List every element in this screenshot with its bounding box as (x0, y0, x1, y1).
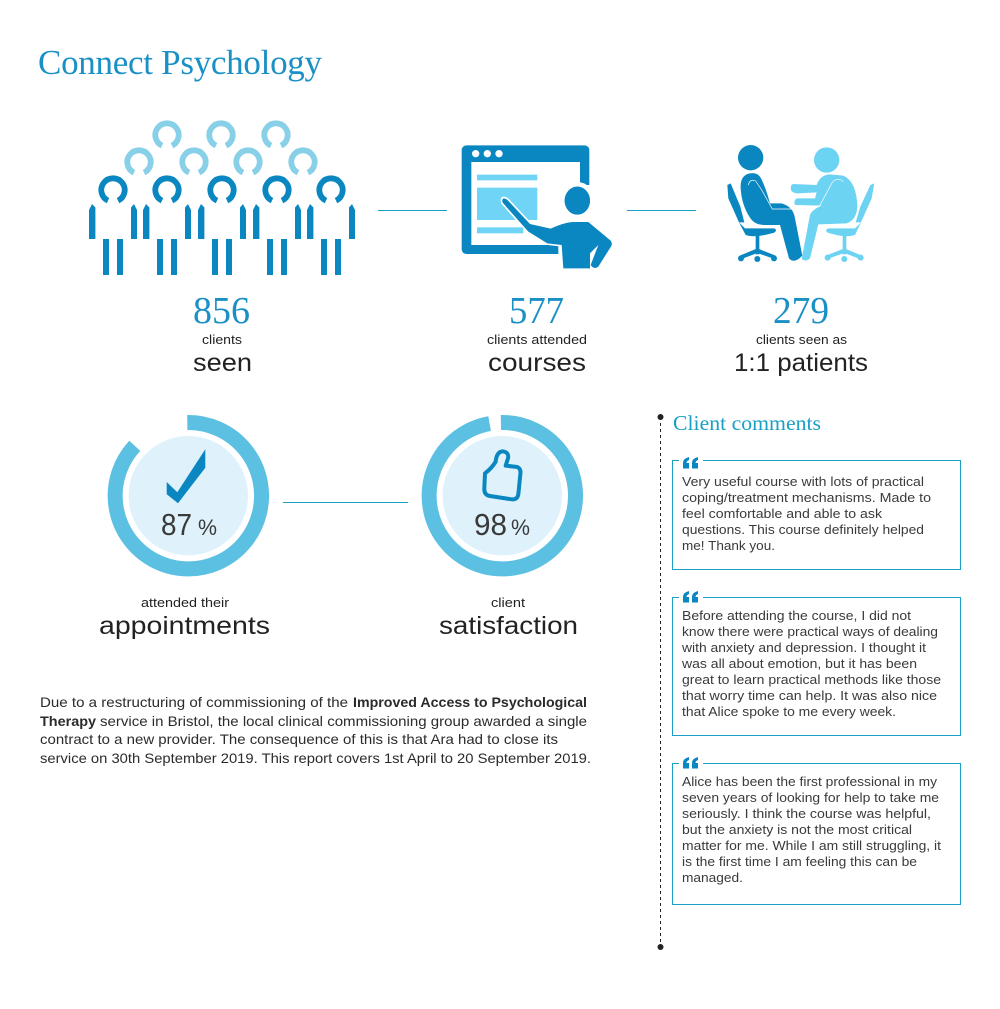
donut: attended appointments 87% (115, 422, 262, 569)
connector line (378, 210, 447, 211)
label: client satisfaction (439, 595, 578, 640)
label: attended appointments: attended their (141, 595, 230, 610)
comment box 3: seven years of looking for help to take me (682, 790, 939, 805)
comment box 2: that Alice spoke to me every week. (682, 704, 896, 719)
comment box 2: with anxiety and depression. I thought it (681, 640, 926, 655)
comment box 1: Very useful course with lots of practical (682, 474, 924, 489)
connector line (283, 502, 408, 503)
stat: clients attended courses: courses (488, 349, 586, 377)
label: client satisfaction: client (491, 595, 525, 610)
comment box 1: coping/treatment mechanisms. Made to (682, 490, 931, 505)
stat: clients seen (193, 290, 252, 377)
label: attended appointments (99, 595, 270, 640)
stat: clients attended courses (487, 290, 587, 377)
text block: service explanation (40, 694, 591, 766)
stat: clients seen: clients (202, 332, 243, 347)
donut: client satisfaction 98% (429, 422, 576, 569)
comment box 2: great to learn practical methods like those (682, 672, 941, 687)
comment box 2: know there were practical ways of dealing (682, 624, 938, 639)
label: attended appointments: appointments (99, 612, 270, 640)
stat: clients seen: seen (193, 349, 252, 377)
comment box 2: Before attending the course, I did not (682, 608, 911, 623)
stat: 1:1 patients (734, 290, 868, 377)
donut: attended appointments 87%: % (198, 515, 217, 540)
comment box 3: Alice has been the first professional in my (682, 774, 938, 789)
icon: one-to-one session (727, 145, 874, 262)
comment box 1 (672, 455, 960, 570)
donut: attended appointments 87%: 87 (161, 507, 192, 542)
icon: quote mark (683, 757, 698, 768)
comment box 2 (672, 591, 960, 736)
donut: client satisfaction 98%: % (511, 515, 530, 540)
stat: 1:1 patients: 279 (773, 290, 829, 332)
comment box 1: feel comfortable and able to ask (682, 506, 883, 521)
text block: service explanation: contract to a new provider. The consequence of this is that Ara had to close its (40, 731, 558, 747)
comment box 3 (672, 757, 960, 904)
icon: crowd of clients (89, 123, 355, 275)
text block: service explanation: service on 30th September 2019. This report covers 1st April to 20 September 2019. (40, 750, 591, 766)
comment box 2: was all about emotion, but it has been (681, 656, 917, 671)
label: client satisfaction: satisfaction (439, 612, 578, 640)
comment box 1: questions. This course definitely helped (682, 522, 924, 537)
text block: service explanation: service in Bristol, the local clinical commissioning group awarded a single (100, 713, 587, 729)
comment box 3: seriously. I think the course was helpful, (682, 806, 931, 821)
comment box 3: matter for me. While I am still struggling, it (682, 838, 941, 853)
comment box 3: is the first time I am feeling this can be (682, 854, 917, 869)
icon: check mark (167, 449, 205, 503)
comment box 3: but the anxiety is not the most critical (682, 822, 912, 837)
stat: clients attended courses: clients attended (487, 332, 587, 347)
comment box 3: managed. (682, 870, 743, 885)
icon: quote mark (683, 591, 698, 602)
text block: service explanation: Therapy (40, 713, 96, 729)
stat: clients seen: 856 (193, 290, 250, 332)
text block: service explanation: Due to a restructuring of commissioning of the (40, 694, 348, 710)
heading: client comments: Client comments (673, 411, 821, 435)
comment box 1: me! Thank you. (682, 538, 775, 553)
title: Connect Psychology (38, 43, 322, 82)
connector line (627, 210, 696, 211)
dotted timeline (658, 414, 664, 950)
donut: client satisfaction 98%: 98 (474, 507, 507, 542)
stat: clients attended courses: 577 (509, 290, 564, 332)
comment box 2: that worry time can help. It was also nice (682, 688, 937, 703)
stat: 1:1 patients: 1:1 patients (734, 349, 868, 377)
icon: quote mark (683, 457, 698, 468)
text block: service explanation: Improved Access to Psychological (353, 694, 587, 710)
stat: 1:1 patients: clients seen as (756, 332, 848, 347)
icon: course presenter (462, 145, 612, 268)
icon: thumbs up (484, 451, 521, 499)
